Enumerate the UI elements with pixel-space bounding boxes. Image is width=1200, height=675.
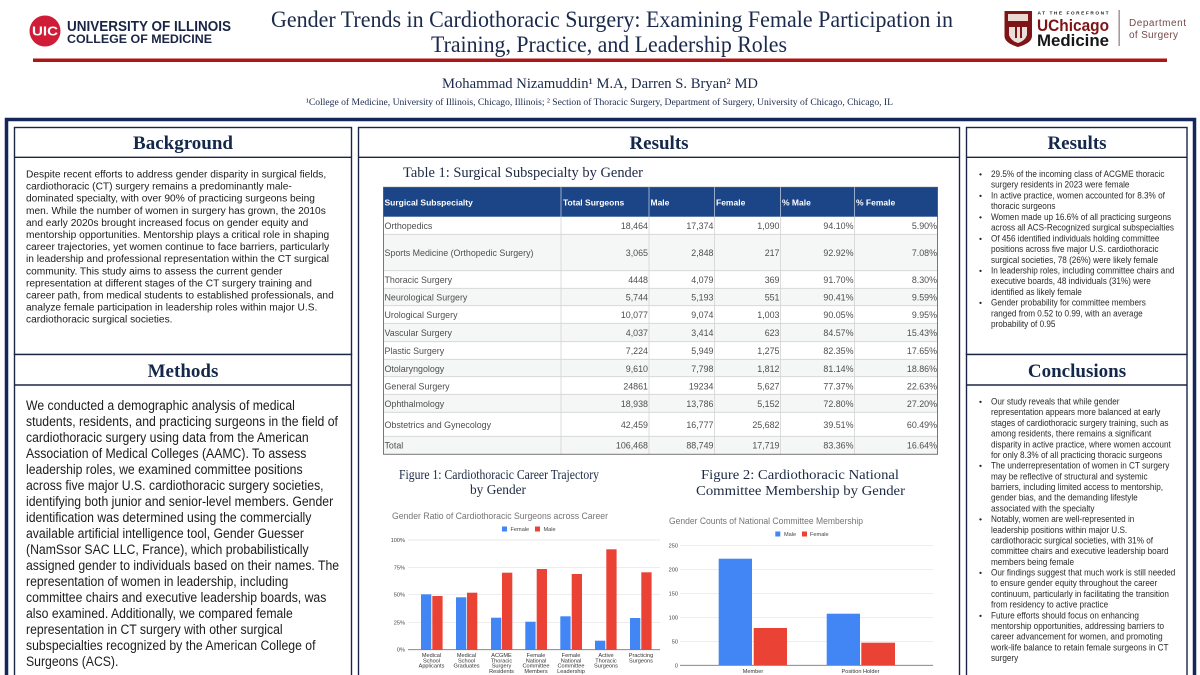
results bullets: ranged from 0.52 to 0.99, with an average bbox=[991, 308, 1143, 319]
table: surgical subspecialty by gender: Neurological Surgery bbox=[384, 292, 468, 302]
table: surgical subspecialty by gender: 7,798 bbox=[691, 364, 714, 374]
conclusions bullets: leadership positions within major U.S. bbox=[991, 524, 1127, 535]
results bullets: surgery residents in 2023 were female bbox=[991, 179, 1130, 190]
conclusions bullets: • bbox=[979, 514, 982, 524]
background text: cardiothoracic (CT) surgery remains a predominantly male- bbox=[26, 182, 292, 193]
background text: dominated specialty, with over 90% of practicing surgeons being bbox=[26, 194, 315, 205]
table: surgical subspecialty by gender bbox=[384, 187, 938, 455]
conclusions bullets: work-life balance to retain female surgeons in CT bbox=[990, 642, 1169, 653]
table: surgical subspecialty by gender: 77.37% bbox=[823, 382, 854, 392]
panel: results right bbox=[966, 128, 1187, 354]
conclusions bullets: surgery bbox=[991, 653, 1019, 663]
table: surgical subspecialty by gender: 623 bbox=[765, 328, 780, 338]
UChicago Medicine logo: Medicine bbox=[1037, 31, 1109, 50]
bar chart: gender ratio across career: 25% bbox=[394, 620, 405, 626]
bar chart: gender ratio across career: School bbox=[423, 658, 440, 664]
conclusions bullets: for only 8.3% of all practicing thoracic surgeons bbox=[991, 450, 1163, 460]
conclusions bullets: • bbox=[979, 610, 982, 620]
table: surgical subspecialty by gender: 13,786 bbox=[686, 399, 714, 409]
conclusions bullets bbox=[979, 396, 1178, 663]
bar chart: gender ratio across career: Thoracic bbox=[491, 658, 512, 664]
table: surgical subspecialty by gender: 2,848 bbox=[691, 248, 714, 258]
heading: results right: Results bbox=[1047, 133, 1107, 154]
table: surgical subspecialty by gender: 4,037 bbox=[626, 328, 648, 338]
methods text bbox=[26, 397, 342, 669]
table: surgical subspecialty by gender: 17,374 bbox=[686, 221, 714, 231]
table: surgical subspecialty by gender: Thoracic Surgery bbox=[384, 275, 453, 285]
bar chart: gender ratio across career: Residents bbox=[489, 669, 514, 675]
table: surgical subspecialty by gender: Female bbox=[716, 198, 746, 208]
table: surgical subspecialty by gender: General Surgery bbox=[384, 382, 450, 392]
results bullets: executive boards, 48 individuals (31%) were bbox=[991, 276, 1151, 286]
table: surgical subspecialty by gender: Plastic Surgery bbox=[384, 346, 445, 356]
table: surgical subspecialty by gender: 82.35% bbox=[823, 346, 854, 356]
background text: and early 2020s brought increased focus on gender equity and bbox=[26, 218, 309, 229]
table: surgical subspecialty by gender: 27.20% bbox=[907, 399, 937, 409]
results bullets: Gender probability for committee members bbox=[991, 297, 1146, 308]
methods text: also examined. Additionally, we compared female bbox=[26, 605, 293, 621]
conclusions bullets: • bbox=[979, 461, 982, 471]
background text: cardiothoracic surgical societies. bbox=[26, 315, 172, 326]
bar chart: gender ratio across career: Male bbox=[544, 527, 556, 533]
bar chart: gender ratio across career: National bbox=[561, 658, 581, 664]
results bullets: positions across five major U.S. cardiothoracic bbox=[991, 244, 1159, 254]
bar chart: national committee membership: 200 bbox=[669, 567, 678, 573]
table: surgical subspecialty by gender: Sports Medicine (Orthopedic Surgery) bbox=[384, 248, 534, 258]
table: surgical subspecialty by gender: 18,938 bbox=[621, 399, 648, 409]
table: surgical subspecialty by gender: 42,459 bbox=[621, 420, 648, 430]
table: surgical subspecialty by gender: Total Surgeons bbox=[563, 198, 625, 208]
table title: Table 1: Surgical Subspecialty by Gender bbox=[403, 165, 643, 181]
table: surgical subspecialty by gender: 1,275 bbox=[757, 346, 780, 356]
results bullets: In leadership roles, including committee chairs and bbox=[991, 265, 1175, 276]
table: surgical subspecialty by gender: 7.08% bbox=[912, 248, 937, 258]
UChicago Medicine logo: UChicago bbox=[1037, 16, 1109, 35]
title: Training, Practice, and Leadership Roles bbox=[431, 32, 787, 57]
heading: background: Background bbox=[133, 133, 233, 154]
table: surgical subspecialty by gender: 5.90% bbox=[912, 221, 937, 231]
table: surgical subspecialty by gender: 16.64% bbox=[907, 440, 937, 450]
bar chart: gender ratio across career: ACGME bbox=[491, 653, 512, 659]
conclusions bullets: continuum, particularly in facilitating the transition bbox=[991, 588, 1169, 599]
table: surgical subspecialty by gender: 1,003 bbox=[757, 310, 780, 320]
bar chart: gender ratio across career: Thoracic bbox=[595, 658, 617, 664]
figure 2 title: Figure 2: Cardiothoracic National bbox=[701, 468, 899, 483]
table: surgical subspecialty by gender: 3,414 bbox=[691, 328, 714, 338]
heading: conclusions: Conclusions bbox=[1028, 361, 1126, 382]
table: surgical subspecialty by gender: 5,193 bbox=[691, 292, 714, 302]
conclusions bullets: Our findings suggest that much work is still needed bbox=[991, 567, 1175, 578]
table: surgical subspecialty by gender: 17,719 bbox=[752, 440, 780, 450]
bar chart: gender ratio across career: Medical bbox=[457, 653, 476, 659]
methods text: representation of women in leadership, including bbox=[26, 573, 288, 589]
methods text: committee chairs and executive leadership boards, was bbox=[26, 589, 326, 605]
table: surgical subspecialty by gender: 9.95% bbox=[912, 310, 937, 320]
background text: mentorship opportunities. Mentorship plays a critical role in shaping bbox=[26, 230, 329, 241]
bar chart: gender ratio across career: Graduates bbox=[453, 664, 480, 670]
table: surgical subspecialty by gender: 4,079 bbox=[691, 275, 714, 285]
conclusions bullets: Future efforts should focus on enhancing bbox=[991, 610, 1139, 620]
methods text: cardiothoracic surgery using data from the American bbox=[26, 429, 309, 445]
background text: representation at different stages of the CT surgery training and bbox=[26, 278, 312, 289]
methods text: subspecialties recognized by the American College of bbox=[26, 637, 316, 653]
table: surgical subspecialty by gender: Ophthalmology bbox=[384, 399, 445, 409]
bar chart: gender ratio across career bbox=[391, 511, 660, 675]
bar chart: gender ratio across career: Committee bbox=[557, 664, 585, 670]
background text: in leadership and professional representation within the CT surgical bbox=[26, 254, 329, 265]
background text: career path, from medical students to established professionals, and bbox=[26, 290, 334, 302]
conclusions bullets: disparity in active practice, where women account bbox=[991, 439, 1171, 449]
table: surgical subspecialty by gender: 25,682 bbox=[752, 420, 780, 430]
bar chart: gender ratio across career: Members bbox=[524, 669, 548, 675]
table: surgical subspecialty by gender: 9,610 bbox=[626, 364, 648, 374]
results bullets: Of 456 identified individuals holding committee bbox=[991, 233, 1160, 243]
table: surgical subspecialty by gender: 3,065 bbox=[626, 248, 648, 258]
conclusions bullets: associated with the specialty bbox=[991, 503, 1095, 514]
conclusions bullets: members being female bbox=[991, 556, 1074, 567]
table: surgical subspecialty by gender: 1,812 bbox=[757, 364, 780, 374]
background text bbox=[26, 169, 337, 326]
title rule bbox=[33, 58, 1167, 62]
table: surgical subspecialty by gender: Urological Surgery bbox=[384, 310, 458, 320]
conclusions bullets: career advancement for women, and promoting bbox=[991, 631, 1163, 642]
methods text: Surgeons (ACS). bbox=[26, 653, 118, 669]
bar chart: gender ratio across career: Active bbox=[598, 653, 614, 659]
panel: methods bbox=[14, 354, 352, 675]
bar chart: gender ratio across career: Leadership bbox=[557, 669, 585, 675]
table: surgical subspecialty by gender: 39.51% bbox=[823, 420, 854, 430]
methods text: identifying both junior and senior-level members. Gender bbox=[26, 493, 334, 509]
bar chart: gender ratio across career: Female bbox=[527, 653, 545, 659]
table: surgical subspecialty by gender: 9.59% bbox=[912, 292, 937, 302]
bar chart: gender ratio across career: 0% bbox=[397, 648, 405, 654]
conclusions bullets: from residency to active practice bbox=[991, 599, 1108, 610]
UIC logo: COLLEGE OF MEDICINE bbox=[67, 34, 212, 46]
bar chart: national committee membership: 50 bbox=[672, 639, 678, 645]
bar chart: gender ratio across career: Practicing bbox=[629, 653, 653, 659]
bar chart: gender ratio across career: 75% bbox=[394, 565, 405, 571]
bar chart: national committee membership: Female bbox=[810, 532, 829, 538]
methods text: We conducted a demographic analysis of medical bbox=[26, 397, 295, 413]
table: surgical subspecialty by gender: Orthopedics bbox=[384, 221, 433, 231]
bar chart: national committee membership: Gender Counts of National Committee Membership bbox=[669, 516, 863, 526]
table: surgical subspecialty by gender: 72.80% bbox=[823, 399, 854, 409]
conclusions bullets: The underrepresentation of women in CT surgery bbox=[991, 460, 1170, 471]
conclusions bullets: Our study reveals that while gender bbox=[991, 396, 1120, 407]
table: surgical subspecialty by gender: 81.14% bbox=[823, 364, 854, 374]
panel: conclusions bbox=[966, 354, 1187, 675]
results bullets: • bbox=[979, 266, 982, 276]
bar chart: gender ratio across career: School bbox=[458, 658, 475, 664]
table: surgical subspecialty by gender: 9,074 bbox=[691, 310, 714, 320]
table: surgical subspecialty by gender: 5,152 bbox=[757, 399, 780, 409]
bar chart: national committee membership: Member bbox=[743, 669, 763, 675]
methods text: (NamSsor SAC LLC, France), which probabilistically bbox=[26, 541, 309, 557]
bar chart: national committee membership bbox=[669, 516, 933, 675]
heading: results: Results bbox=[629, 133, 689, 154]
conclusions bullets: may be reflective of structural and systemic bbox=[991, 471, 1148, 481]
bar chart: national committee membership: 250 bbox=[669, 543, 678, 549]
bar chart: gender ratio across career: Applicants bbox=[419, 664, 445, 670]
UChicago Medicine logo: of Surgery bbox=[1129, 30, 1178, 41]
table: surgical subspecialty by gender: 369 bbox=[765, 275, 780, 285]
table: surgical subspecialty by gender: 84.57% bbox=[823, 328, 854, 338]
table: surgical subspecialty by gender: 10,077 bbox=[621, 310, 648, 320]
methods text: students, residents, and practicing surgeons in the field of bbox=[26, 413, 338, 429]
title: Gender Trends in Cardiothoracic Surgery: Examining Female Participation in bbox=[271, 7, 953, 32]
table: surgical subspecialty by gender: 94.10% bbox=[823, 221, 854, 231]
table: surgical subspecialty by gender: 5,627 bbox=[757, 382, 780, 392]
results bullets: thoracic surgeons bbox=[991, 201, 1056, 211]
table: surgical subspecialty by gender: 88,749 bbox=[686, 440, 714, 450]
table: surgical subspecialty by gender: 8.30% bbox=[912, 275, 937, 285]
methods text: across five major U.S. cardiothoracic surgery societies, bbox=[26, 477, 324, 493]
table: surgical subspecialty by gender: 90.05% bbox=[823, 310, 854, 320]
table: surgical subspecialty by gender: Obstetrics and Gynecology bbox=[384, 420, 492, 430]
table: surgical subspecialty by gender: 92.92% bbox=[823, 248, 854, 258]
results bullets: surgical societies, 78 (26%) were likely female bbox=[991, 254, 1158, 265]
table: surgical subspecialty by gender: 217 bbox=[765, 248, 780, 258]
UChicago Medicine logo bbox=[1004, 10, 1186, 50]
conclusions bullets: gender bias, and the demanding lifestyle bbox=[991, 492, 1138, 503]
bar chart: gender ratio across career: Surgery bbox=[492, 664, 511, 670]
conclusions bullets: • bbox=[979, 396, 982, 406]
methods text: representation in CT surgery with other surgical bbox=[26, 621, 283, 637]
results bullets: • bbox=[979, 190, 982, 200]
methods text: leadership roles, we examined committee positions bbox=[26, 461, 303, 477]
table: surgical subspecialty by gender: 18,464 bbox=[621, 221, 648, 231]
methods text: identification was determined using the commercially bbox=[26, 509, 312, 525]
conclusions bullets: to ensure gender equity throughout the career bbox=[991, 578, 1157, 588]
UIC logo bbox=[30, 16, 231, 46]
bar chart: national committee membership: Position Holder bbox=[842, 669, 880, 675]
results bullets: • bbox=[979, 169, 982, 179]
figure 1 title: Figure 1: Cardiothoracic Career Trajectory bbox=[399, 468, 599, 483]
table: surgical subspecialty by gender: 17.65% bbox=[907, 346, 937, 356]
results bullets: In active practice, women accounted for 8.3% of bbox=[991, 190, 1165, 201]
conclusions bullets: among residents, there remains a significant bbox=[991, 428, 1152, 439]
background text: men. While the number of women in surgery has grown, the 2010s bbox=[26, 206, 326, 217]
conclusions bullets: cardiothoracic surgical societies, with 31% of bbox=[991, 535, 1154, 546]
methods text: Association of Medical Colleges (AAMC). To assess bbox=[26, 445, 306, 461]
table: surgical subspecialty by gender: 5,744 bbox=[626, 292, 648, 302]
table: surgical subspecialty by gender: Male bbox=[650, 198, 670, 208]
conclusions bullets: Notably, women are well-represented in bbox=[991, 514, 1134, 524]
table: surgical subspecialty by gender: Total bbox=[384, 440, 403, 450]
table: surgical subspecialty by gender: 83.36% bbox=[823, 440, 854, 450]
table: surgical subspecialty by gender: 106,468 bbox=[616, 440, 648, 450]
conclusions bullets: representation appears more balanced at early bbox=[991, 407, 1161, 417]
table: surgical subspecialty by gender: % Male bbox=[782, 198, 811, 208]
table: surgical subspecialty by gender: 60.49% bbox=[907, 420, 937, 430]
methods text: assigned gender to individuals based on their names. The bbox=[26, 557, 339, 573]
authors: Mohammad Nizamuddin¹ M.A, Darren S. Bryan² MD bbox=[442, 76, 758, 92]
bar chart: gender ratio across career: Surgeons bbox=[629, 658, 653, 664]
UIC logo: UIC bbox=[32, 24, 58, 38]
bar chart: national committee membership: Male bbox=[784, 532, 796, 538]
table: surgical subspecialty by gender: % Female bbox=[856, 198, 895, 208]
conclusions bullets: stages of cardiothoracic surgery training, such as bbox=[991, 417, 1169, 428]
bar chart: national committee membership: 100 bbox=[669, 615, 678, 621]
table: surgical subspecialty by gender: 90.41% bbox=[823, 292, 854, 302]
results bullets: • bbox=[979, 212, 982, 222]
methods text: available artificial intelligence tool, Gender Guesser bbox=[26, 525, 305, 541]
table: surgical subspecialty by gender: Otolaryngology bbox=[384, 364, 445, 374]
panel: background bbox=[14, 128, 352, 354]
bar chart: gender ratio across career: National bbox=[526, 658, 546, 664]
conclusions bullets: committee chairs and executive leadership board bbox=[991, 546, 1169, 556]
conclusions bullets: • bbox=[979, 568, 982, 578]
figure 2 title: Committee Membership by Gender bbox=[696, 484, 905, 499]
bar chart: gender ratio across career: Gender Ratio of Cardiothoracic Surgeons across Career bbox=[392, 511, 608, 521]
results bullets: identified as likely female bbox=[991, 286, 1082, 297]
panel: results center bbox=[358, 128, 960, 675]
table: surgical subspecialty by gender: 22.63% bbox=[907, 382, 937, 392]
UChicago Medicine logo: AT THE FOREFRONT bbox=[1038, 10, 1109, 16]
table: surgical subspecialty by gender: 16,777 bbox=[686, 420, 714, 430]
bar chart: national committee membership: 0 bbox=[675, 663, 678, 669]
results bullets: • bbox=[979, 233, 982, 243]
results bullets: • bbox=[979, 298, 982, 308]
table: surgical subspecialty by gender: 19234 bbox=[689, 382, 714, 392]
results bullets: 29.5% of the incoming class of ACGME thoracic bbox=[991, 169, 1165, 179]
conclusions bullets: mentorship opportunities, addressing barriers to bbox=[991, 621, 1164, 631]
background text: Despite recent efforts to address gender disparity in surgical fields, bbox=[26, 169, 326, 181]
results bullets bbox=[979, 169, 1177, 329]
table: surgical subspecialty by gender: 15.43% bbox=[907, 328, 937, 338]
table: surgical subspecialty by gender: 551 bbox=[765, 292, 780, 302]
table: surgical subspecialty by gender: Surgical Subspecialty bbox=[384, 198, 473, 208]
conclusions bullets: barriers, including limited access to mentorship, bbox=[991, 482, 1163, 492]
table: surgical subspecialty by gender: 24861 bbox=[623, 382, 648, 392]
bar chart: gender ratio across career: Surgeons bbox=[594, 664, 618, 670]
results bullets: across all ACS-Recognized surgical subspecialties bbox=[991, 222, 1175, 233]
background text: analyze female participation in leadership roles within major U.S. bbox=[26, 303, 317, 314]
table: surgical subspecialty by gender: Vascular Surgery bbox=[384, 328, 452, 338]
background text: community. This study aims to assess the current gender bbox=[26, 266, 283, 277]
table: surgical subspecialty by gender: 1,090 bbox=[757, 221, 780, 231]
UIC logo: UNIVERSITY OF ILLINOIS bbox=[67, 19, 231, 35]
results bullets: Women made up 16.6% of all practicing surgeons bbox=[991, 211, 1172, 222]
bar chart: gender ratio across career: Female bbox=[510, 527, 529, 533]
background text: career trajectories, yet women continue to face barriers, particularly bbox=[26, 242, 330, 253]
table: surgical subspecialty by gender: 18.86% bbox=[907, 364, 937, 374]
table: surgical subspecialty by gender: 4448 bbox=[628, 275, 648, 285]
figure 1 title: by Gender bbox=[470, 483, 526, 498]
table: surgical subspecialty by gender: 91.70% bbox=[823, 275, 854, 285]
heading: methods: Methods bbox=[148, 361, 218, 382]
bar chart: gender ratio across career: Committee bbox=[522, 664, 550, 670]
affiliations: ¹College of Medicine, University of Illinois, Chicago, Illinois; ² Section of Thoracic Surgery, Department of Surgery, University of Chicago, Chicago, IL bbox=[306, 97, 893, 108]
table: surgical subspecialty by gender: 5,949 bbox=[691, 346, 714, 356]
bar chart: gender ratio across career: 50% bbox=[394, 593, 405, 599]
UChicago Medicine logo: Department bbox=[1129, 18, 1186, 29]
results bullets: probability of 0.95 bbox=[991, 319, 1056, 329]
bar chart: gender ratio across career: Medical bbox=[422, 653, 441, 659]
table: surgical subspecialty by gender: 7,224 bbox=[626, 346, 648, 356]
bar chart: national committee membership: 150 bbox=[669, 591, 678, 597]
bar chart: gender ratio across career: Female bbox=[562, 653, 580, 659]
bar chart: gender ratio across career: 100% bbox=[391, 538, 405, 544]
